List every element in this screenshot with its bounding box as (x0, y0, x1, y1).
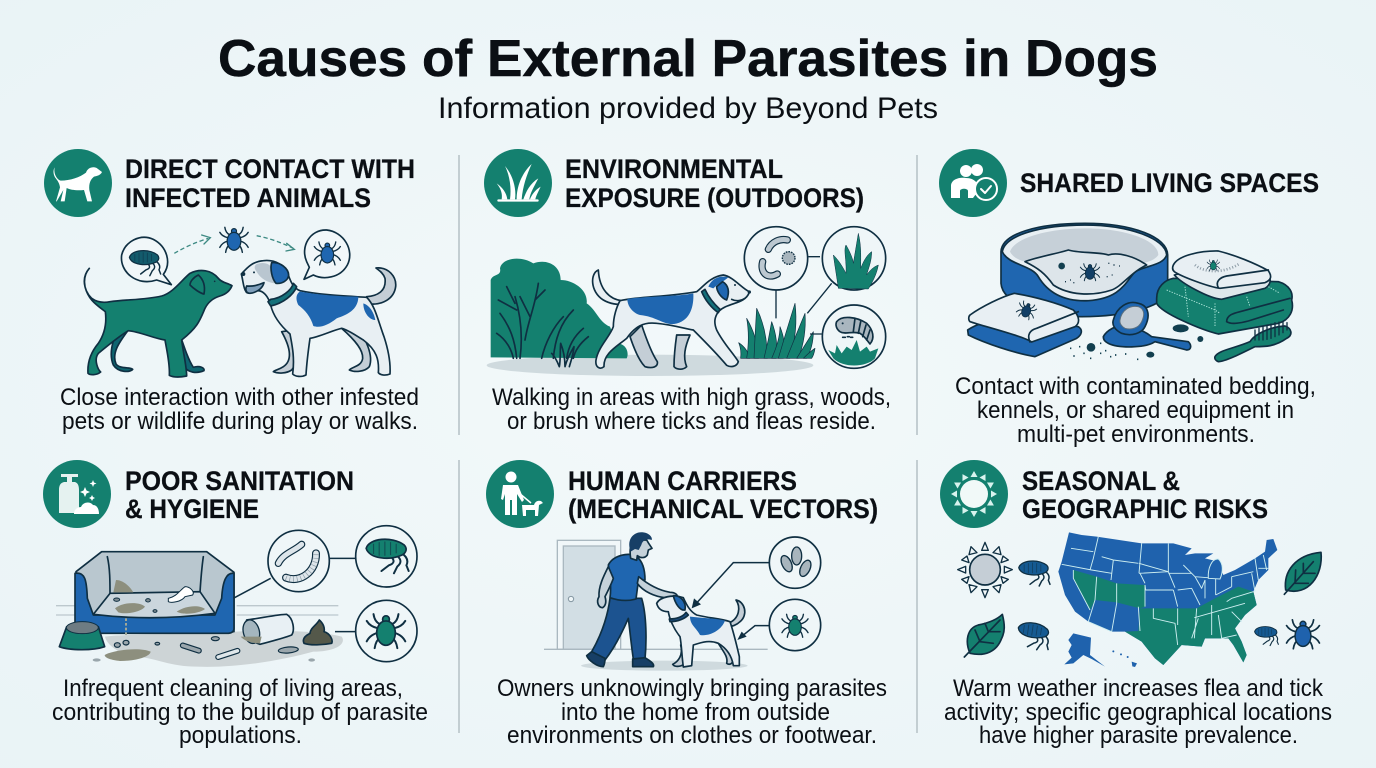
description: into the home from outside (561, 699, 830, 726)
subtitle: Information provided by Beyond Pets (438, 92, 938, 125)
description: contributing to the buildup of parasite (52, 699, 428, 726)
description: have higher parasite prevalence. (979, 722, 1298, 749)
panel: shared living spaces (939, 149, 1319, 448)
magnifier: larva in grass (822, 305, 886, 368)
icon: person walking a dog (486, 460, 554, 528)
heading (565, 154, 864, 213)
fallen cup (240, 614, 293, 645)
heading (125, 154, 415, 213)
panel: seasonal and geographic risks (940, 460, 1332, 749)
sun (958, 542, 1012, 598)
description: pets or wildlife during play or walks. (62, 408, 418, 435)
person (587, 532, 677, 667)
heading: (MECHANICAL VECTORS) (568, 494, 878, 524)
couch (75, 552, 234, 633)
description: populations. (179, 722, 302, 749)
bush (491, 259, 628, 367)
grass clump (739, 303, 815, 358)
description: Walking in areas with high grass, woods, (492, 384, 891, 411)
illustration: two dogs passing parasites (84, 227, 396, 377)
heading (1022, 466, 1268, 524)
stains and worms (93, 618, 315, 662)
connector arrows (692, 563, 769, 640)
floor mess (105, 631, 343, 667)
icon: people with check mark (939, 149, 1007, 217)
food bowl (59, 622, 105, 650)
description: Owners unknowingly bringing parasites (497, 675, 887, 702)
panel: direct contact with infected animals (44, 149, 419, 435)
tick (1287, 620, 1319, 649)
panel: human carriers (486, 460, 887, 749)
description (497, 675, 887, 749)
description: environments on clothes or footwear. (507, 722, 877, 749)
dog being petted (657, 596, 745, 667)
illustration: dog walking through brush (487, 227, 886, 376)
icon: sun (940, 460, 1008, 528)
heading (125, 466, 354, 524)
connector lines (776, 257, 832, 334)
magnifier: grass (822, 227, 886, 290)
ground (487, 355, 813, 376)
illustration: owner petting dog by door (544, 532, 821, 671)
brush (1215, 322, 1291, 362)
fleas (1019, 561, 1050, 586)
title: Causes of External Parasites in Dogs (218, 30, 1158, 88)
walking dog (593, 270, 751, 369)
heading: HUMAN CARRIERS (568, 466, 797, 496)
speech bubble: tick (304, 230, 350, 279)
magnifier: eggs (769, 537, 821, 588)
description (492, 384, 891, 435)
heading: EXPOSURE (OUTDOORS) (565, 183, 864, 213)
illustration: US risk map with parasites (958, 532, 1321, 667)
heading: SHARED LIVING SPACES (1020, 168, 1319, 198)
green dog (84, 268, 232, 377)
Alaska and Hawaii (1064, 633, 1137, 667)
heading (568, 466, 878, 524)
tick between dogs (220, 227, 248, 252)
ground shadow (581, 661, 748, 671)
pet bed (1001, 223, 1168, 317)
description (955, 373, 1316, 448)
speech bubble: flea (121, 237, 171, 285)
heading: SEASONAL & (1022, 466, 1180, 496)
panel: environmental exposure (484, 149, 891, 435)
description: Contact with contaminated bedding, (955, 373, 1316, 400)
folded towel stack, left (968, 293, 1081, 357)
map of the United States (1058, 532, 1277, 665)
connector lines (233, 558, 356, 632)
description (60, 384, 419, 435)
icon: soap bottle and suds (43, 460, 111, 528)
magnifier: worms (268, 530, 329, 592)
illustration: dirty couch and debris (56, 526, 417, 667)
description: Infrequent cleaning of living areas, (63, 675, 403, 702)
heading: GEOGRAPHIC RISKS (1022, 494, 1268, 524)
leaves (964, 552, 1321, 657)
description: Close interaction with other infested (60, 384, 419, 411)
heading: POOR SANITATION (125, 466, 354, 496)
panel: poor sanitation and hygiene (43, 460, 428, 749)
droppings (303, 620, 332, 645)
description: activity; specific geographical locations (944, 699, 1332, 726)
heading: DIRECT CONTACT WITH (125, 154, 415, 184)
description (52, 675, 428, 749)
heading: ENVIRONMENTAL (565, 154, 783, 184)
icon: white dog in teal circle (44, 149, 112, 217)
description: kennels, or shared equipment in (977, 397, 1294, 424)
white and blue spotted dog (241, 260, 396, 376)
heading: & HYGIENE (125, 494, 259, 524)
illustration: contaminated bedding and grooming tools (968, 223, 1292, 362)
description: multi-pet environments. (1017, 421, 1255, 448)
door (544, 540, 768, 649)
grooming mitt with handle (1103, 302, 1191, 350)
description (944, 675, 1332, 749)
description: or brush where ticks and fleas reside. (507, 408, 876, 435)
description: Warm weather increases flea and tick (953, 675, 1324, 702)
folded towel stack, right (1157, 251, 1292, 334)
dashed arrows (174, 235, 294, 253)
magnifier: tick (769, 599, 821, 651)
magnifier: beetle-like tick (356, 600, 417, 662)
magnifier: larvae (744, 227, 808, 290)
icon: grass in teal circle (484, 149, 552, 217)
heading: INFECTED ANIMALS (125, 183, 371, 213)
debris specks (1070, 324, 1203, 359)
magnifier: flea (356, 526, 417, 587)
